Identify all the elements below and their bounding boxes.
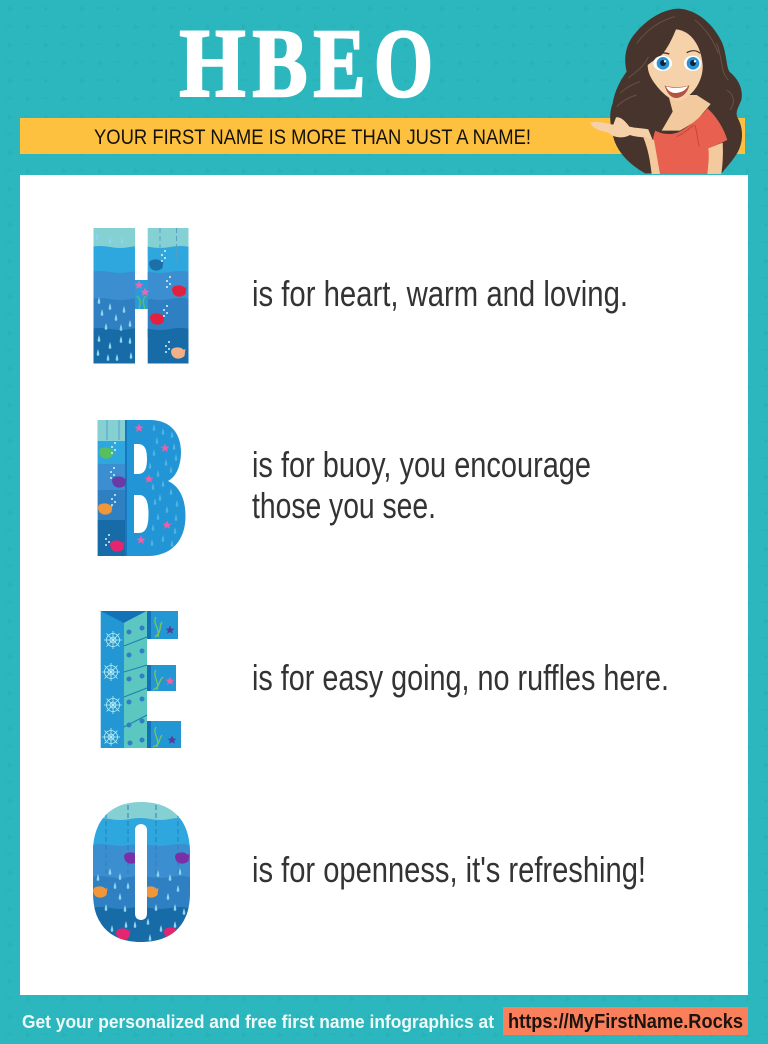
row 4: letter O <box>90 800 646 944</box>
brows <box>653 51 700 57</box>
row 2: letter B <box>95 418 591 558</box>
line: H: is for heart, warm and loving. <box>252 273 628 314</box>
title: E <box>314 10 366 118</box>
letter E illustration <box>101 611 181 748</box>
hair <box>610 9 742 173</box>
subtitle banner <box>20 118 745 154</box>
footer <box>22 1007 748 1035</box>
title: B <box>252 10 308 118</box>
subtitle banner: YOUR FIRST NAME IS MORE THAN JUST A NAME! <box>94 125 531 149</box>
white content panel <box>20 175 748 995</box>
shirt <box>653 108 727 174</box>
neck and chest <box>662 95 711 131</box>
link badge: https://MyFirstName.Rocks <box>508 1011 743 1033</box>
row 2: letter B: those you see. <box>252 485 436 526</box>
face <box>648 29 703 101</box>
letter B illustration <box>98 420 186 556</box>
footer text: Get your personalized and free first name infographics at <box>22 1011 494 1032</box>
letter O illustration <box>90 800 194 944</box>
eyes <box>653 56 701 71</box>
title: H <box>180 10 246 118</box>
line: O: is for openness, it's refreshing! <box>252 849 646 890</box>
line: E: is for easy going, no ruffles here. <box>252 657 669 698</box>
illustration: woman presenting <box>590 9 742 174</box>
lines: B: is for buoy, you encourage <box>252 444 591 485</box>
arm and hand <box>707 143 723 174</box>
row 1: letter H <box>90 225 628 365</box>
row 3: letter E <box>101 611 669 748</box>
title <box>180 10 433 118</box>
mouth <box>665 85 689 98</box>
letter H illustration <box>90 225 192 365</box>
title: O <box>374 10 433 118</box>
